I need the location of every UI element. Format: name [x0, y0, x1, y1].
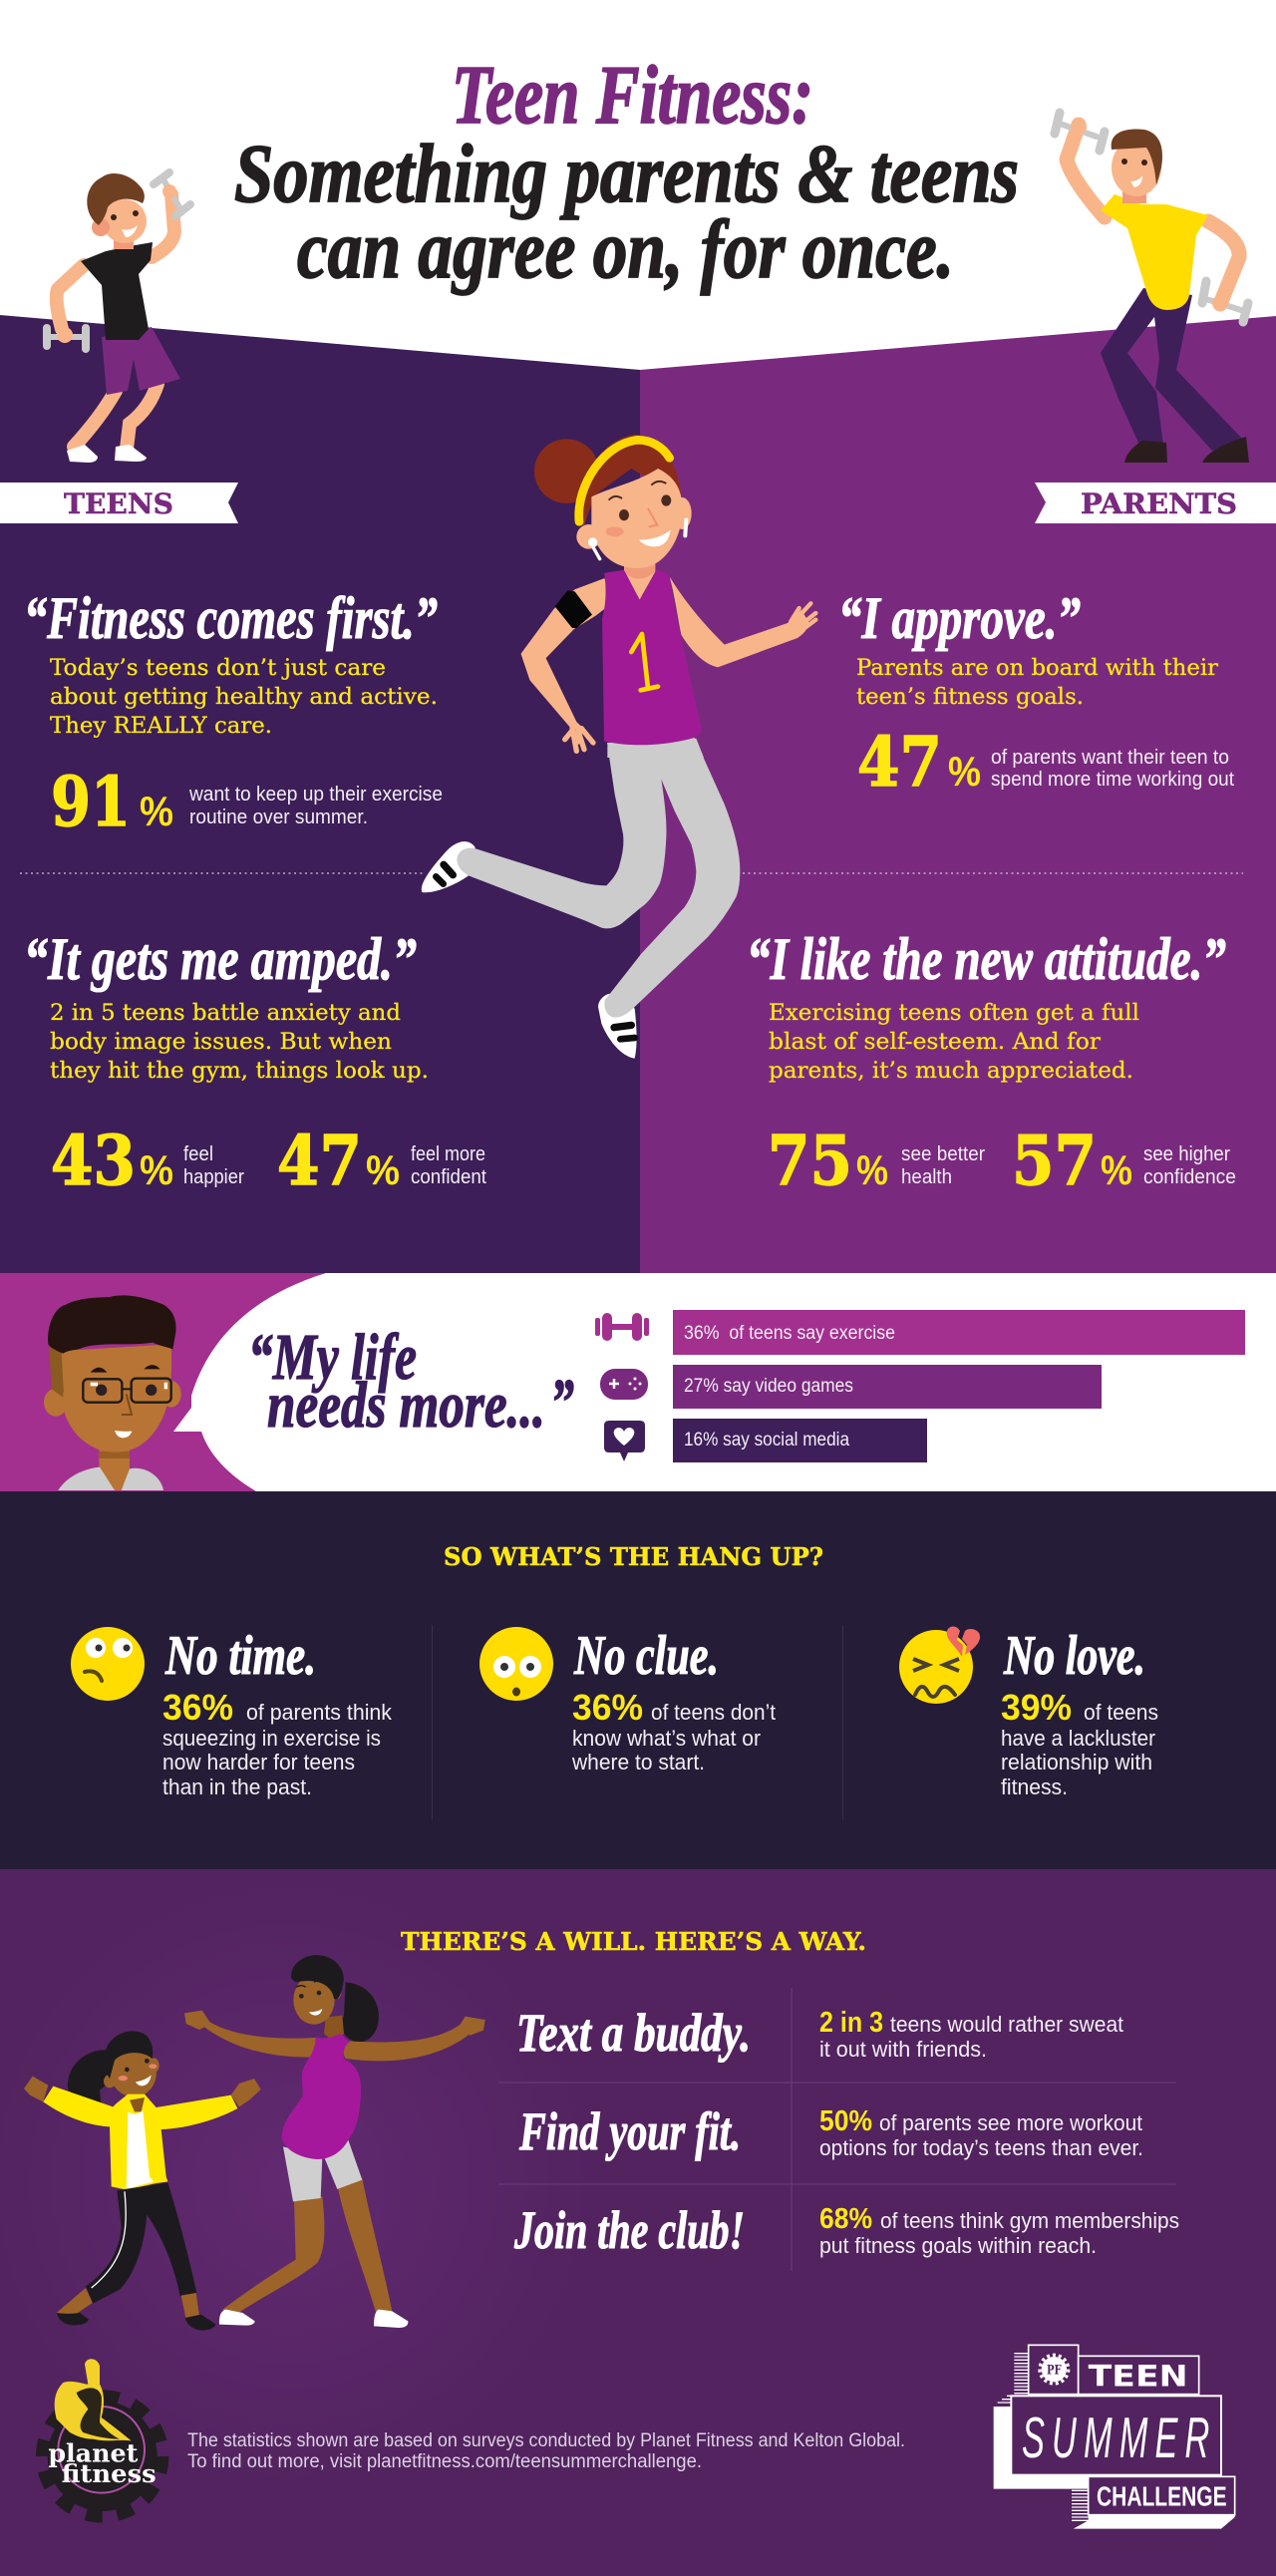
banner: parents [1035, 483, 1276, 523]
footnote [187, 2430, 905, 2472]
column: no clue: 36% [572, 1687, 643, 1728]
icon: dumbbell [595, 1313, 649, 1341]
logo: teen summer challenge [994, 2345, 1235, 2529]
column: no clue: where to start. [571, 1750, 705, 1774]
column: no love: fitness. [1001, 1774, 1068, 1799]
column: no time: squeezing in exercise is [162, 1726, 381, 1751]
row: text a buddy: it out with friends. [819, 2037, 987, 2062]
stat 43%: happier [183, 1166, 244, 1188]
row: text a buddy: 2 in 3 [819, 2007, 883, 2039]
column: no clue: of teens don’t [651, 1700, 776, 1725]
row: join the club: of teens think gym memberships [880, 2208, 1179, 2233]
panel: teens [0, 315, 640, 1273]
stat 47%: of parents want their teen to [991, 747, 1229, 769]
banner: teens: TEENS [64, 487, 173, 520]
bar: social media 16%: 16% say social media [684, 1430, 849, 1450]
column: no clue: No clue. [573, 1625, 719, 1687]
column: no time [71, 1625, 393, 1799]
logo: teen summer challenge: PF [1047, 2363, 1062, 2379]
icon: game controller [600, 1369, 648, 1400]
stat 47%: feel more [411, 1143, 485, 1165]
column: no love: 39% [1001, 1687, 1072, 1728]
panel: hang up [0, 1491, 1276, 1869]
stat 75% [768, 1122, 985, 1201]
description: parents, it’s much appreciated. [769, 1059, 1133, 1084]
row: text a buddy [516, 2003, 1123, 2063]
title [234, 49, 1019, 296]
illustration: parent man with dumbbells [1055, 113, 1249, 463]
panel: parents [640, 316, 1276, 1273]
title: Teen Fitness: [452, 49, 813, 142]
stat 47%: % [366, 1146, 400, 1193]
column: no time: than in the past. [162, 1774, 312, 1799]
description [50, 656, 438, 739]
stat 91%: % [140, 788, 173, 834]
description: Exercising teens often get a full [769, 1001, 1139, 1026]
description: blast of self-esteem. And for [769, 1030, 1102, 1055]
column: no clue [479, 1625, 776, 1774]
row: find your fit [518, 2101, 1143, 2161]
heading: SO WHAT’S THE HANG UP? [444, 1542, 823, 1571]
row: join the club: put fitness goals within reach. [819, 2233, 1097, 2258]
description [856, 656, 1218, 710]
stat 57% [1012, 1122, 1236, 1201]
stat 91%: routine over summer. [189, 806, 368, 828]
stat 47%: 47 [857, 723, 942, 803]
row: join the club [513, 2200, 1179, 2260]
stat 57%: 57 [1012, 1122, 1097, 1201]
footnote: The statistics shown are based on surveys conducted by Planet Fitness and Kelton Global. [187, 2430, 905, 2451]
teens block: fitness comes first [24, 585, 443, 842]
stat 47%: % [948, 748, 981, 795]
row: text a buddy: teens would rather sweat [890, 2012, 1123, 2037]
column: no love: have a lackluster [1001, 1726, 1155, 1751]
stat 47%: 47 [277, 1122, 362, 1201]
bar: video games 27%: 27% say video games [684, 1376, 853, 1397]
description: Parents are on board with their [856, 656, 1218, 681]
title: can agree on, for once. [297, 203, 954, 296]
row: find your fit: options for today’s teens than ever. [819, 2135, 1143, 2160]
description: 2 in 5 teens battle anxiety and [50, 1001, 401, 1026]
column: no love: of teens [1084, 1700, 1158, 1725]
quote heading [248, 1321, 574, 1442]
heading: THERE’S A WILL. HERE’S A WAY. [401, 1927, 866, 1956]
teens block: it gets me amped [24, 926, 486, 1201]
quote heading: “Fitness comes first.” [24, 585, 438, 651]
logo: planet fitness [42, 2359, 162, 2517]
logo: teen summer challenge: SUMMER [1022, 2407, 1209, 2470]
row: join the club: 68% [819, 2203, 872, 2235]
stat 57%: % [1101, 1146, 1132, 1193]
stat 91%: want to keep up their exercise [188, 784, 443, 805]
banner: parents: PARENTS [1081, 487, 1237, 520]
stat 57%: see higher [1143, 1143, 1230, 1165]
panel: there's a will [0, 1869, 1276, 2576]
stat 43%: 43 [51, 1122, 136, 1201]
column: no clue: know what’s what or [572, 1726, 761, 1751]
illustration: teen boy with dumbbells [47, 172, 190, 463]
icon: heart message [604, 1421, 645, 1461]
quote heading: needs more... [267, 1369, 545, 1442]
footnote: To find out more, visit planetfitness.com/teensummerchallenge. [187, 2451, 702, 2472]
stat 47%: confident [411, 1166, 486, 1188]
bar: exercise 36%: 36% of teens say exercise [684, 1323, 895, 1344]
stat 47% [857, 723, 1234, 803]
parents block: i like the new attitude [747, 926, 1236, 1201]
quote heading: “My life [248, 1321, 417, 1394]
logo: teen summer challenge: CHALLENGE [1097, 2480, 1227, 2511]
description: about getting healthy and active. [50, 685, 438, 710]
stat 43%: % [140, 1146, 173, 1193]
column: no love [899, 1625, 1158, 1799]
title: Something parents & teens [234, 128, 1019, 220]
row: text a buddy: Text a buddy. [516, 2003, 751, 2063]
stat 43%: feel [183, 1143, 213, 1165]
logo: planet fitness: fitness [62, 2458, 157, 2488]
row: find your fit: of parents see more workout [879, 2110, 1142, 2135]
column: no time: 36% [162, 1687, 233, 1728]
icon: thinking emoji [71, 1627, 145, 1701]
illustration: boy with glasses [44, 1295, 181, 1490]
quote heading: “I approve.” [838, 585, 1081, 651]
icon: surprised emoji [479, 1627, 553, 1701]
quote heading: “It gets me amped.” [24, 926, 417, 992]
parents block: i approve [838, 585, 1234, 803]
icon: heartbroken emoji [899, 1627, 980, 1704]
column: no time: of parents think [246, 1700, 393, 1725]
description: they hit the gym, things look up. [50, 1059, 429, 1084]
column: no love: relationship with [1001, 1750, 1152, 1774]
stat 75%: % [856, 1146, 888, 1193]
stat 91% [51, 763, 443, 842]
bar: video games 27% [673, 1365, 1102, 1409]
stat 75%: see better [901, 1143, 985, 1165]
stat 47%: spend more time working out [991, 769, 1234, 791]
row: join the club: Join the club! [513, 2200, 745, 2260]
stat 91%: 91 [51, 763, 131, 842]
quote heading: ” [550, 1366, 574, 1439]
logo: teen summer challenge: TEEN [1089, 2359, 1188, 2393]
description [50, 1001, 429, 1084]
description: They REALLY care. [50, 714, 272, 739]
illustration: mother and daughter [24, 1955, 485, 2330]
stat 43% [51, 1122, 244, 1201]
illustration: jumping girl [422, 435, 815, 1059]
stat 57%: confidence [1143, 1166, 1236, 1188]
banner: teens [0, 483, 238, 523]
column: no time: No time. [164, 1625, 316, 1687]
row: find your fit: 50% [819, 2105, 872, 2137]
stat 47% [277, 1122, 486, 1201]
description [769, 1001, 1139, 1084]
bar: social media 16% [673, 1419, 927, 1462]
description: Today’s teens don’t just care [50, 656, 386, 681]
column: no love: No love. [1003, 1625, 1145, 1687]
panel: my life needs more band [0, 1273, 1276, 1491]
column: no time: now harder for teens [162, 1750, 355, 1774]
speech bubble [173, 1273, 1276, 1491]
description: teen’s fitness goals. [856, 685, 1084, 710]
stat 75%: health [901, 1166, 952, 1188]
stat 75%: 75 [768, 1122, 852, 1201]
description: body image issues. But when [50, 1030, 392, 1055]
logo: planet fitness: planet [48, 2437, 139, 2467]
bar: exercise 36% [673, 1310, 1245, 1355]
divider: dotted lines [20, 872, 1243, 874]
row: find your fit: Find your fit. [518, 2101, 741, 2161]
